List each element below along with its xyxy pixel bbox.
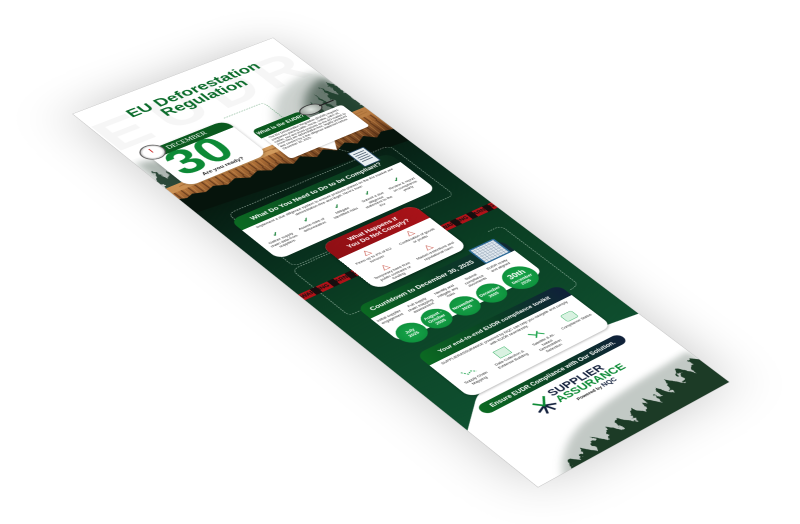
milestone: november: 2025 [460, 304, 474, 311]
countdown body: EUDR ready and aligned [485, 258, 511, 273]
step 2: Assess risks of deforestation [297, 217, 327, 233]
are you ready: Are you ready? [201, 156, 246, 176]
step 1: ✓ [269, 230, 281, 238]
consequence 4: △ [421, 243, 435, 251]
bubble tail [318, 140, 338, 150]
red header [320, 204, 430, 259]
milestone: july: July [403, 327, 416, 335]
panel header: What Do You Need to Do to be Compliant? [248, 161, 383, 221]
toolkit body [429, 295, 612, 398]
powered by: Powered by NQC [575, 376, 619, 401]
consequence 1: Fines up to 4% of EU turnover [354, 247, 393, 265]
panel header [230, 153, 403, 232]
solution pill: Ensure EUDR Compliance with Our Solution. [488, 340, 617, 408]
page background artwork [78, 48, 638, 430]
forest bottom [558, 350, 729, 476]
caution tape left: WARNING WARNING [299, 270, 360, 299]
panel: what happens if you do not comply [320, 204, 469, 290]
icon: magnifier [298, 100, 334, 116]
step 4: ✓ [361, 189, 373, 196]
tool: supply chain mapping: Supply Chain Mapping [463, 370, 489, 385]
intro text: Implement a due diligence system to ensure products placed on the EU market are deforestation-free and legal. Here's how: [255, 167, 394, 229]
milestone: july: 2025 [407, 330, 420, 338]
milestone: november [443, 292, 487, 319]
milestone text: Initial supplier engagement [375, 309, 404, 325]
step 5: ✓ [391, 176, 402, 183]
infographic page [73, 38, 729, 487]
countdown header: Countdown to December 30, 2025 [367, 259, 476, 312]
step 5: Review & report on compliance yearly [387, 177, 418, 192]
logo wordmark: SUPPLIER [544, 363, 607, 398]
toolkit header [416, 285, 578, 371]
step 1: Gather supply chain data from suppliers [267, 232, 299, 248]
red header: You Do Not Comply? [345, 218, 411, 249]
bubble header [251, 111, 310, 138]
title: Regulation [156, 76, 251, 118]
watermark EUDR [78, 45, 324, 160]
bubble header: What is the EUDR? [255, 114, 306, 136]
consequence 2: Confiscation of goods or profits [398, 227, 436, 246]
panel: what do you need to do [234, 156, 432, 257]
consequence 4: Market restrictions and reputational harm [415, 241, 455, 261]
panel: countdown [360, 242, 540, 343]
tool: compliance: Compliance Status [560, 313, 593, 330]
step 3: ✓ [331, 203, 343, 210]
logo wordmark: ASSURANCE [552, 361, 629, 404]
tool: satellite: Satellite & AI-based Deforestation Detection [531, 333, 563, 353]
milestone: december: 2025 [487, 291, 500, 298]
consequence 3: △ [378, 262, 392, 271]
step 3: Mitigate identified risks [332, 206, 359, 219]
icon: notebook calendar [468, 238, 511, 264]
calendar month header [144, 120, 234, 159]
wood log [166, 107, 395, 213]
watermark EUDR: R [245, 48, 338, 100]
panel body [242, 162, 437, 260]
consequence 2: △ [403, 229, 416, 237]
panel: toolkit [420, 287, 610, 396]
fog and trees top right [224, 70, 376, 154]
milestone: 30th december: December [510, 273, 534, 285]
milestone: august october: 2025 [434, 318, 447, 325]
calendar month header: DECEMBER [165, 131, 209, 150]
consequence 1: △ [359, 248, 373, 257]
toolkit header: Your end-to-end EUDR compliance toolkit [437, 296, 552, 354]
countdown body [371, 250, 543, 342]
caution tape right: WARNING WARNING [440, 203, 496, 230]
milestone: december: December [478, 285, 501, 298]
calendar card [144, 120, 268, 187]
milestone: august october: August - [422, 310, 443, 321]
logo [532, 361, 629, 414]
step 4: Submit a due diligence statement to the EU [360, 191, 394, 209]
milestone: 30th december: 2025 [520, 278, 532, 285]
date number: 30 [152, 130, 246, 182]
title: EU Deforestation [122, 60, 264, 120]
consequence 3: Temporary bans from public contracts or funding [373, 261, 412, 282]
milestone: august october [414, 305, 459, 332]
watermark EUDR: E [78, 106, 167, 158]
countdown body: Submit compliance documents [463, 273, 488, 288]
fog and trees left [135, 150, 218, 201]
bubble: what is the EUDR [253, 105, 370, 159]
countdown body: Identify and mitigate any risks [433, 284, 459, 298]
logo mark [532, 396, 557, 414]
countdown body: Full supply chain mapping assessment [406, 297, 435, 314]
toolkit intro: SUPPLIERASSURANCE powered by NQC can help you navigate and comply with EUDR seamlessly. [440, 300, 569, 365]
bubble body: The EU Deforestation Regulation (EUDR) requires companies placing cattle, cocoa, coffee, palm oil, rubber, soy and wood products on the EU market to prove they are deforestation-free, legally produced and covered by a due diligence statement before December 30, 2025. [268, 109, 349, 150]
countdown header [356, 240, 520, 323]
watermark EUDR: D [191, 66, 284, 119]
milestone: 30th december [494, 262, 546, 294]
step 2: ✓ [300, 216, 312, 223]
milestone: december [470, 280, 513, 306]
watermark EUDR: U [135, 86, 228, 138]
dashed connector lines [142, 83, 579, 367]
milestone: july [389, 319, 434, 347]
tool: data collection: Data Collection & Evidence Building [493, 349, 529, 369]
bubble body [262, 105, 370, 159]
milestone: november: November [451, 298, 475, 311]
icon: clipboard [347, 147, 381, 167]
dark green background [175, 114, 660, 430]
icon: clock [134, 142, 171, 163]
milestone: august october: October [427, 313, 447, 324]
red header: What Happens if [346, 216, 399, 242]
milestone: 30th december: 30th [506, 269, 528, 281]
